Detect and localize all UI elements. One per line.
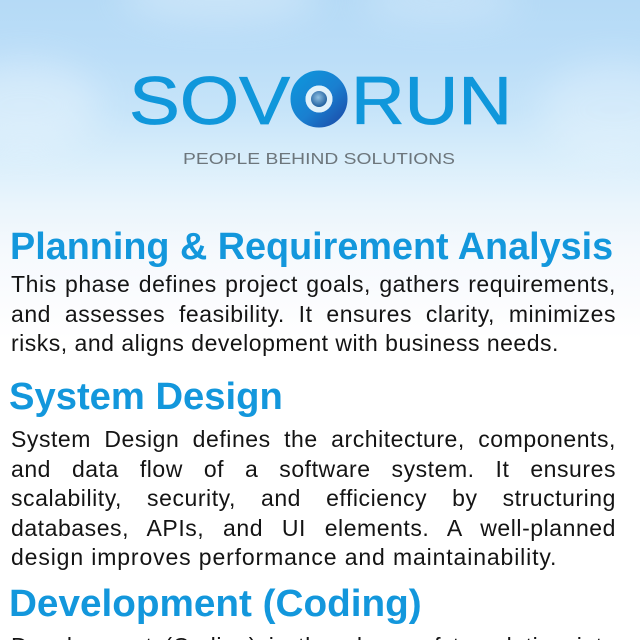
text block: system design: databases, APIs, and UI elements. A well-planned [11, 515, 616, 541]
text block: system design: System Design defines the architecture, components, [11, 426, 616, 452]
text block: planning: risks, and aligns development with business needs. [11, 330, 559, 356]
heading: system design: System Design [9, 376, 283, 418]
text block: system design: design improves performance and maintainability. [11, 544, 557, 570]
text block: planning [11, 271, 616, 356]
wordmark right: RUN [351, 63, 512, 139]
logo [129, 63, 512, 168]
tagline: PEOPLE BEHIND SOLUTIONS [183, 151, 455, 168]
wordmark left: SOV [129, 63, 291, 139]
text block: system design: scalability, security, and efficiency by structuring [11, 485, 616, 511]
text block: system design: and data flow of a software system. It ensures [11, 456, 616, 482]
heading: planning: Planning & Requirement Analysis [10, 226, 613, 268]
sky background [0, 0, 640, 340]
text block: planning: and assesses feasibility. It ensures clarity, minimizes [11, 301, 616, 327]
text block: planning: This phase defines project goals, gathers requirements, [11, 271, 616, 297]
heading: development: Development (Coding) [9, 583, 422, 625]
text block: system design [11, 426, 616, 570]
icon: globe ring [298, 78, 340, 120]
